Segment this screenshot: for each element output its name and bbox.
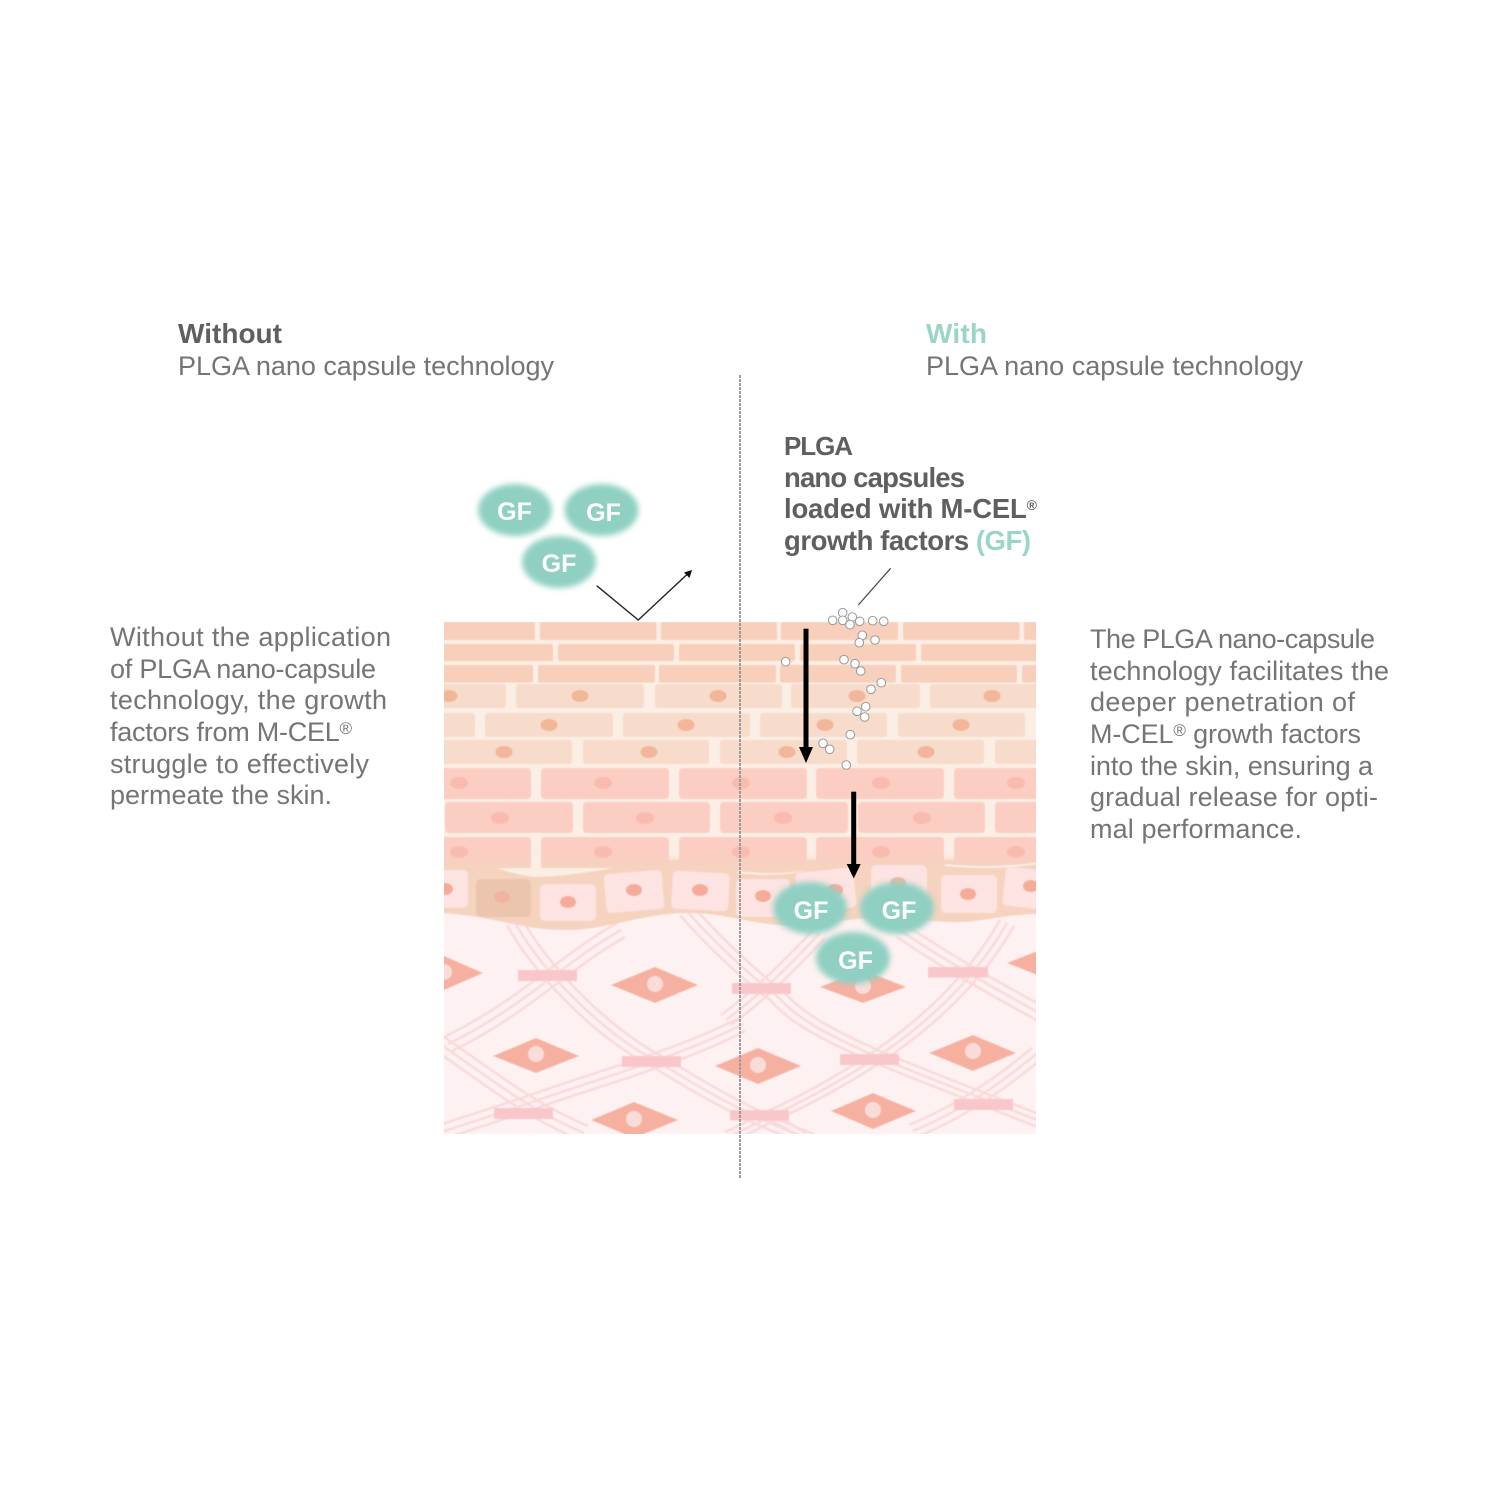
divider line — [739, 375, 741, 1178]
collagen bars — [494, 967, 1013, 1120]
text block: without explanation: ® — [339, 719, 352, 738]
stratum spinosum rows — [438, 768, 1042, 868]
spinosum nuclei — [450, 777, 1025, 858]
callout: PLGA nano capsules label — [784, 431, 1038, 556]
text block: with explanation: ® — [1173, 721, 1186, 740]
callout: PLGA nano capsules label: loaded with M-CEL — [784, 493, 1027, 524]
text block: with explanation: deeper penetration of — [1090, 687, 1355, 717]
text block: with explanation: into the skin, ensuring a — [1090, 751, 1374, 781]
icon: growth factors above skin — [478, 484, 638, 588]
basal nuclei — [437, 877, 1039, 908]
arrow: deeper delivery — [847, 792, 861, 878]
PLGA nano capsules — [781, 608, 888, 769]
skin cross-section illustration — [444, 622, 1036, 1134]
icon: growth factors inside skin: GF — [882, 897, 916, 925]
callout: PLGA nano capsules label: growth factors (GF) — [784, 525, 1031, 556]
text block: without explanation: struggle to effectively — [110, 749, 370, 779]
stratum granulosum rows — [438, 684, 1042, 764]
callout: PLGA nano capsules label: ® — [1027, 497, 1038, 513]
fibroblast diamonds — [444, 951, 1036, 1134]
basal layer band — [440, 854, 1040, 930]
collagen fibres — [444, 912, 1036, 1134]
text block: with explanation: technology facilitates the — [1090, 656, 1389, 686]
icon: growth factors inside skin: GF — [838, 947, 873, 975]
text block: without explanation: technology, the growth — [110, 685, 387, 715]
text block: without explanation — [110, 622, 391, 810]
text block: without explanation: permeate the skin. — [110, 780, 332, 810]
icon: growth factors inside skin — [773, 882, 934, 984]
text block: with explanation: M-CEL — [1090, 719, 1173, 749]
basal cells — [436, 865, 1056, 921]
text block: with explanation: growth factors — [1186, 719, 1361, 749]
text block: without explanation: of PLGA nano-capsule — [110, 654, 376, 684]
text block: without explanation: Without the application — [110, 622, 391, 652]
text block: with explanation — [1090, 624, 1389, 844]
heading: with — [926, 318, 1304, 381]
dermis layer — [444, 913, 1036, 1134]
heading: with: With — [926, 318, 987, 349]
icon: growth factors inside skin: GF — [794, 897, 828, 925]
leader line to capsules — [858, 568, 891, 605]
icon: growth factors above skin: GF — [586, 499, 621, 527]
icon: growth factors above skin: GF — [497, 498, 532, 526]
text block: with explanation: mal performance. — [1090, 814, 1302, 844]
callout: PLGA nano capsules label: nano capsules — [784, 462, 965, 493]
text block: with explanation: gradual release for opti- — [1090, 782, 1378, 812]
heading: without: PLGA nano capsule technology — [178, 351, 554, 381]
icon: growth factors above skin: GF — [542, 550, 576, 578]
fibroblast nuclei — [436, 964, 981, 1127]
heading: with: PLGA nano capsule technology — [926, 351, 1304, 381]
arrow: growth factors bounce off skin — [597, 570, 692, 620]
text block: without explanation: factors from M-CEL — [110, 717, 340, 747]
granulosum nuclei — [440, 690, 1000, 758]
heading: without — [178, 318, 554, 381]
text block: with explanation: The PLGA nano-capsule — [1090, 624, 1375, 654]
arrow: capsule penetration — [799, 629, 813, 763]
heading: without: Without — [178, 318, 282, 349]
callout: PLGA nano capsules label: PLGA — [784, 431, 853, 461]
stratum corneum rows — [438, 622, 1042, 682]
